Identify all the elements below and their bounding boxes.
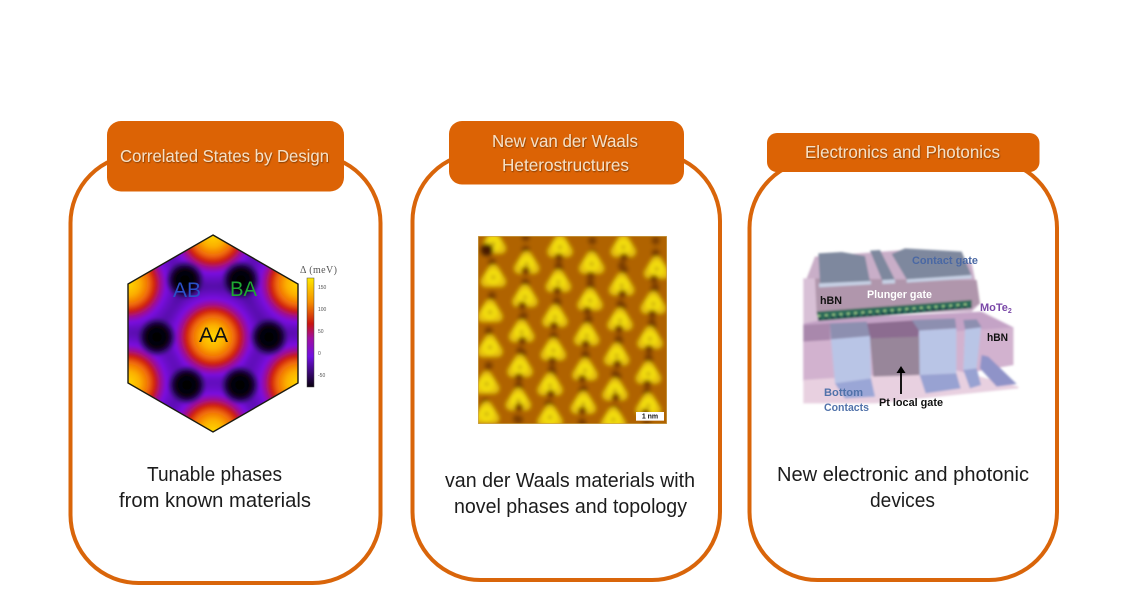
caption: tunable phases: from known materials [119,490,311,512]
site label AB: AB [173,279,201,302]
caption: van der Waals materials: novel phases and topology [454,496,687,518]
site label BA: BA [230,278,257,301]
chart: hexagonal moiré potential map [127,234,336,433]
label: Pt local gate: Pt local gate [879,397,943,409]
label: MoTe2: 2 [1008,308,1012,315]
label: Bottom Contacts [824,387,869,414]
panel outline [412,153,720,580]
panel: new van der Waals heterostructures [412,121,720,580]
panel outline [70,155,380,583]
panel outline [750,160,1057,580]
caption: tunable phases [119,464,311,512]
label: hBN top: hBN [820,295,842,307]
heading tab: Correlated States by Design: Correlated States by Design [120,146,329,166]
site label AA: AA [199,324,228,347]
diagram: gated MoTe2 device [803,248,1018,414]
colour scale legend: 100 [318,307,327,313]
caption: van der Waals materials: van der Waals materials with [445,470,695,492]
colour scale legend: 50 [318,329,324,335]
caption: electronic and photonic devices: devices [870,490,935,512]
colour scale legend: Δ (meV) [300,265,337,276]
heading tab: New van der Waals Heterostructures: Heterostructures [502,155,629,175]
caption: electronic and photonic devices [777,464,1029,512]
colour scale legend [300,265,337,387]
colour scale legend: -50 [318,373,325,379]
colour scale legend: 150 [318,285,327,291]
scale bar: 1 nm [636,412,664,421]
heading tab: New van der Waals Heterostructures [449,121,684,184]
colour scale legend: 0 [318,351,321,357]
heading tab: Electronics and Photonics [767,133,1040,172]
label: Contact gate: Contact gate [912,255,978,267]
label: hBN right: hBN [987,332,1008,344]
panel: correlated states by design [70,121,380,583]
scale bar: 1 nm: 1 nm [642,414,658,421]
label: Plunger gate: Plunger gate [867,289,932,301]
caption: van der Waals materials [445,470,695,518]
panel: electronics and photonics [750,133,1057,580]
arrow: to Pt local gate [896,366,906,394]
label: MoTe2: MoTe [980,302,1008,314]
image: STM lattice micrograph [478,236,667,424]
caption: tunable phases: Tunable phases [147,464,282,486]
heading tab: Correlated States by Design [107,121,344,192]
heading tab: New van der Waals Heterostructures: New van der Waals [492,131,638,151]
label: Bottom Contacts: Contacts [824,402,869,414]
heading tab: Electronics and Photonics: Electronics and Photonics [805,142,1000,162]
caption: electronic and photonic devices: New electronic and photonic [777,464,1029,486]
label: Bottom Contacts: Bottom [824,387,863,399]
